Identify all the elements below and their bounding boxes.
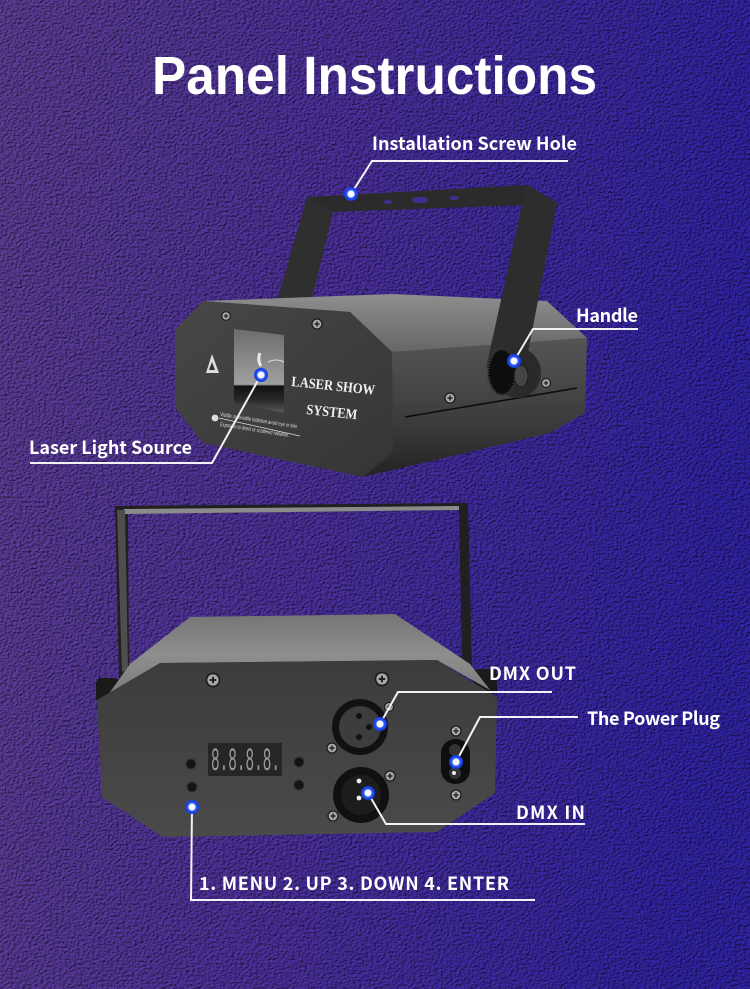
- printed label line 2: SYSTEM: [306, 402, 358, 423]
- side face: [363, 338, 587, 477]
- callout: menu buttons: 1. MENU 2. UP 3. DOWN 4. ENTER: [199, 870, 509, 896]
- side knobs: [96, 669, 497, 704]
- callout: handle: [507, 302, 638, 368]
- laser window: [234, 329, 284, 413]
- front face: [175, 301, 393, 477]
- back panel: [97, 660, 497, 837]
- DMX OUT connector: [332, 699, 388, 755]
- title: Panel Instructions: [152, 46, 597, 106]
- DMX IN connector: [333, 767, 389, 823]
- bottom laser device: [96, 503, 497, 837]
- adjustment knob: [488, 348, 541, 398]
- laser warning text: Exposure to direct or scattered radiation.: [220, 422, 290, 439]
- callout: DMX OUT: DMX OUT: [489, 660, 576, 686]
- screws: [206, 672, 461, 821]
- top face: [203, 294, 587, 352]
- callout: installation screw hole: [344, 130, 577, 201]
- laser warning text: [212, 412, 300, 439]
- callout: menu buttons: [185, 800, 535, 900]
- top laser device: [175, 185, 587, 477]
- menu buttons: [186, 757, 304, 792]
- callout: the power plug: [449, 705, 720, 769]
- printed label: LASER SHOW: [291, 374, 376, 399]
- laser warning text: Visible or invisible radiation avoid eye or skin: [220, 412, 298, 430]
- bottom laser device: 8.8.8.8.: [211, 743, 280, 780]
- callout: handle: Handle: [576, 302, 638, 328]
- warning triangle: [206, 354, 219, 373]
- mounting handle: [278, 185, 528, 298]
- power plug: [441, 739, 470, 784]
- handle right arm: [486, 185, 557, 368]
- LED display: [208, 743, 282, 780]
- callout: laser light source: [29, 368, 268, 463]
- callout: DMX IN: DMX IN: [516, 799, 585, 825]
- screws: [222, 312, 550, 403]
- top face: [108, 614, 490, 695]
- callout: DMX OUT: [373, 660, 576, 731]
- side seam: [405, 388, 577, 417]
- callout: laser light source: Laser Light Source: [29, 434, 192, 460]
- handle frame: [115, 503, 472, 680]
- callout: installation screw hole: Installation Screw Hole: [372, 130, 577, 156]
- callout: DMX IN: [361, 786, 585, 825]
- callout: the power plug: The Power Plug: [587, 705, 720, 731]
